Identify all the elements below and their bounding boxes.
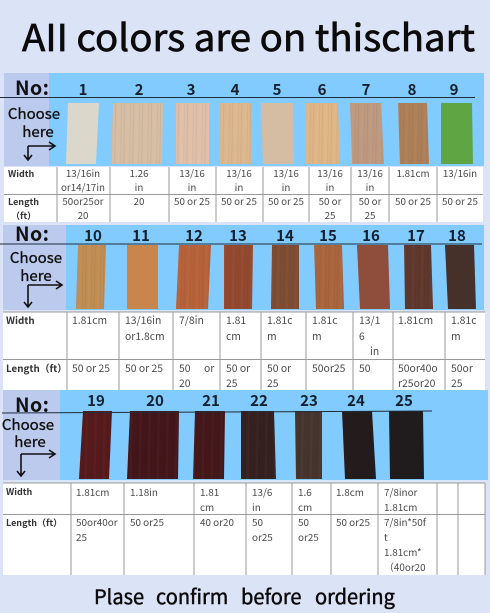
row: width 1-9: 1.81cm — [396, 166, 430, 180]
row: width 1-9: 13/16 — [273, 166, 299, 180]
row: length 10-18: 25 — [267, 375, 279, 390]
swatches 19-25 — [79, 411, 424, 479]
row: width 10-18: 1.81 — [226, 312, 246, 327]
row: width 1-9: in — [135, 180, 143, 194]
row: length 1-9: 25 — [365, 208, 375, 222]
color numbers 10-18: 11 — [132, 225, 150, 246]
color numbers 19-25: 22 — [250, 390, 268, 411]
instruction: choose here: here — [22, 121, 54, 142]
label: No: No: — [15, 218, 49, 247]
row: length 10-18: 50 — [179, 360, 191, 375]
color numbers 19-25: 24 — [347, 390, 365, 411]
swatches 10-18 — [76, 245, 476, 309]
color numbers 1-9 — [79, 79, 459, 100]
color numbers 10-18 — [84, 225, 466, 246]
row: length 1-9: Length — [8, 195, 39, 208]
row: width 19-25: 1.81cm — [384, 500, 417, 514]
instruction: choose here: here — [20, 265, 52, 286]
instruction: choose here: Choose — [2, 414, 54, 435]
table: sizes 19-25 — [3, 483, 485, 575]
row: width 1-9: 13/16in — [66, 166, 100, 180]
row: width 10-18: 1.81c — [312, 312, 338, 327]
row: width 10-18: or1.8cm — [125, 328, 165, 343]
color numbers 1-9: 3 — [187, 79, 195, 100]
row: width 10-18: m — [267, 328, 277, 343]
row: width 10-18: 7/8in — [179, 312, 204, 327]
row: length 1-9 — [8, 194, 478, 222]
row: width 19-25: Width — [6, 485, 33, 498]
color numbers 10-18: 10 — [84, 225, 102, 246]
panel: swatches 10-18 — [0, 218, 484, 310]
row: width 1-9: 13/16in — [443, 166, 477, 180]
row: length 19-25: 1.81cm* — [384, 545, 422, 559]
panel: swatches 1-9 — [0, 72, 484, 166]
row: length 1-9: 25 — [325, 208, 335, 222]
instruction: choose here: Choose — [10, 247, 62, 268]
color numbers 19-25: 19 — [87, 390, 105, 411]
row: length 10-18: 50 or — [226, 360, 251, 375]
row: length 19-25: 25 — [76, 530, 87, 544]
row: width 1-9: Width — [8, 167, 35, 180]
color numbers 10-18: 14 — [276, 225, 294, 246]
color numbers 19-25 — [87, 390, 413, 411]
color numbers 1-9: 5 — [273, 79, 282, 100]
row: length 1-9: 50 or — [359, 194, 382, 208]
row: width 1-9: 13/16 — [357, 166, 383, 180]
row: length 1-9: 50 or 25 — [221, 194, 257, 208]
row: length 10-18: or — [204, 360, 215, 375]
row: length 1-9: （ft） — [11, 209, 36, 222]
arrow: right and down — [24, 281, 62, 307]
row: length 19-25: or25 — [298, 530, 319, 544]
row: width 19-25: 13/6 — [252, 485, 273, 499]
label: No: No: — [15, 389, 49, 418]
title: AII colors are on thischart — [22, 8, 475, 62]
row: width 10-18: in — [370, 343, 379, 358]
row: width 10-18: m — [312, 328, 322, 343]
row: width 10-18: 1.81cm — [72, 312, 107, 327]
footer note: Plase — [94, 581, 144, 610]
row: length 19-25: 50 — [298, 515, 309, 529]
color numbers 10-18: 15 — [319, 225, 337, 246]
row: length 1-9: 50 or 25 — [442, 194, 478, 208]
row: length 10-18: 50or40o — [398, 360, 438, 375]
row: length 19-25: 50 or25 — [336, 515, 370, 529]
row: length 19-25: 50 or25 — [130, 515, 164, 529]
color numbers 19-25: 23 — [300, 390, 318, 411]
row: length 10-18: 20 — [179, 375, 191, 390]
color numbers 1-9: 2 — [135, 79, 144, 100]
row: width 19-25: 7/8inor — [384, 485, 418, 499]
swatches 1-9 — [66, 103, 473, 164]
row: width 19-25: 1.81 — [200, 485, 219, 499]
row: width 1-9 — [8, 166, 477, 194]
footer note: ordering — [315, 581, 395, 610]
row: width 19-25: 1.18in — [130, 485, 158, 499]
color numbers 10-18: 17 — [407, 225, 425, 246]
row: length 1-9: 50 or 25 — [174, 194, 210, 208]
row: width 19-25: in — [252, 500, 261, 514]
row: width 19-25: cm — [298, 500, 312, 514]
color numbers 10-18: 16 — [362, 225, 380, 246]
color numbers 10-18: 18 — [448, 225, 466, 246]
row: length 19-25 — [6, 515, 427, 574]
color numbers 1-9: 7 — [362, 79, 371, 100]
arrow: right and down — [24, 142, 55, 160]
row: length 19-25: or25 — [252, 530, 273, 544]
row: width 19-25: 1.6 — [298, 485, 312, 499]
row: width 10-18: 13/16in — [125, 312, 161, 327]
row: width 1-9: 13/16 — [317, 166, 343, 180]
row: width 10-18: Width — [6, 313, 35, 327]
row: width 1-9: 13/16 — [179, 166, 205, 180]
row: width 19-25: 1.8cm — [336, 485, 364, 499]
footer note: confirm — [156, 581, 228, 610]
row: width 1-9: in — [326, 180, 334, 194]
panel: swatches 19-25 — [2, 389, 488, 480]
row: length 1-9: 50 or — [319, 194, 342, 208]
label: No: No: — [15, 72, 49, 101]
footer note: before — [241, 581, 301, 610]
row: length 10-18: 50 or 25 — [72, 360, 110, 375]
row: width 19-25 — [6, 485, 418, 514]
arrow: right and down — [17, 450, 55, 476]
row: length 10-18: 50 — [359, 360, 371, 375]
row: width 1-9: in — [282, 180, 290, 194]
row: length 1-9: 20 — [78, 208, 88, 222]
row: width 1-9: 1.26 — [129, 166, 149, 180]
row: width 1-9: or14/17in — [61, 180, 105, 194]
row: width 10-18: m — [451, 328, 461, 343]
instruction: choose here — [2, 414, 54, 452]
row: width 10-18: 1.81cm — [398, 312, 433, 327]
row: width 10-18: 13/1 — [359, 312, 381, 327]
row: length 10-18: 25 — [451, 375, 463, 390]
row: length 1-9: 20 — [134, 194, 144, 208]
row: width 10-18: cm — [226, 328, 241, 343]
row: width 10-18: 1.81c — [267, 312, 292, 327]
row: length 19-25: 50or40or — [76, 515, 118, 529]
row: length 10-18: Length（ft） — [6, 361, 67, 375]
color numbers 19-25: 20 — [146, 390, 164, 411]
color numbers 1-9: 1 — [79, 79, 87, 100]
row: width 1-9: in — [188, 180, 196, 194]
table: sizes 10-18 — [3, 312, 485, 390]
row: width 1-9: in — [235, 180, 243, 194]
row: length 10-18: r25or20 — [398, 375, 436, 390]
row: length 10-18: 50 or 25 — [125, 360, 163, 375]
instruction: choose here: Choose — [8, 103, 60, 124]
color numbers 10-18: 12 — [185, 225, 203, 246]
row: width 10-18: 1.81c — [451, 312, 476, 327]
row: length 10-18: 50or25 — [312, 360, 346, 375]
color numbers 1-9: 9 — [450, 79, 459, 100]
row: width 19-25: cm — [200, 500, 214, 514]
row: length 19-25: t — [384, 530, 388, 544]
row: length 19-25: 7/8in*50f — [384, 515, 427, 529]
row: width 10-18: 6 — [359, 328, 365, 343]
row: length 1-9: 50 or 25 — [268, 194, 304, 208]
table: sizes 1-9 — [4, 166, 483, 222]
row: length 19-25: （40or20 — [384, 560, 426, 574]
row: length 10-18: 50or — [451, 360, 474, 375]
instruction: choose here — [8, 103, 60, 142]
color numbers 19-25: 25 — [395, 390, 413, 411]
color numbers 1-9: 6 — [318, 79, 327, 100]
row: width 10-18 — [6, 312, 476, 358]
color numbers 10-18: 13 — [229, 225, 247, 246]
row: width 19-25: 1.81cm — [76, 485, 109, 499]
color numbers 1-9: 8 — [408, 79, 417, 100]
row: length 1-9: 50 or 25 — [395, 194, 431, 208]
row: length 19-25: Length（ft） — [6, 516, 62, 529]
instruction: choose here — [10, 247, 62, 286]
row: length 10-18: 25 — [226, 375, 238, 390]
row: length 19-25: 40 or20 — [200, 515, 234, 529]
row: length 10-18 — [6, 360, 474, 390]
row: length 1-9: 50or25or — [62, 194, 104, 208]
color numbers 19-25: 21 — [202, 390, 220, 411]
row: length 19-25: 50 — [252, 515, 263, 529]
row: width 1-9: in — [366, 180, 374, 194]
color numbers 1-9: 4 — [231, 79, 240, 100]
row: width 1-9: 13/16 — [226, 166, 252, 180]
row: length 10-18: 50 or — [267, 360, 292, 375]
instruction: choose here: here — [14, 431, 46, 452]
